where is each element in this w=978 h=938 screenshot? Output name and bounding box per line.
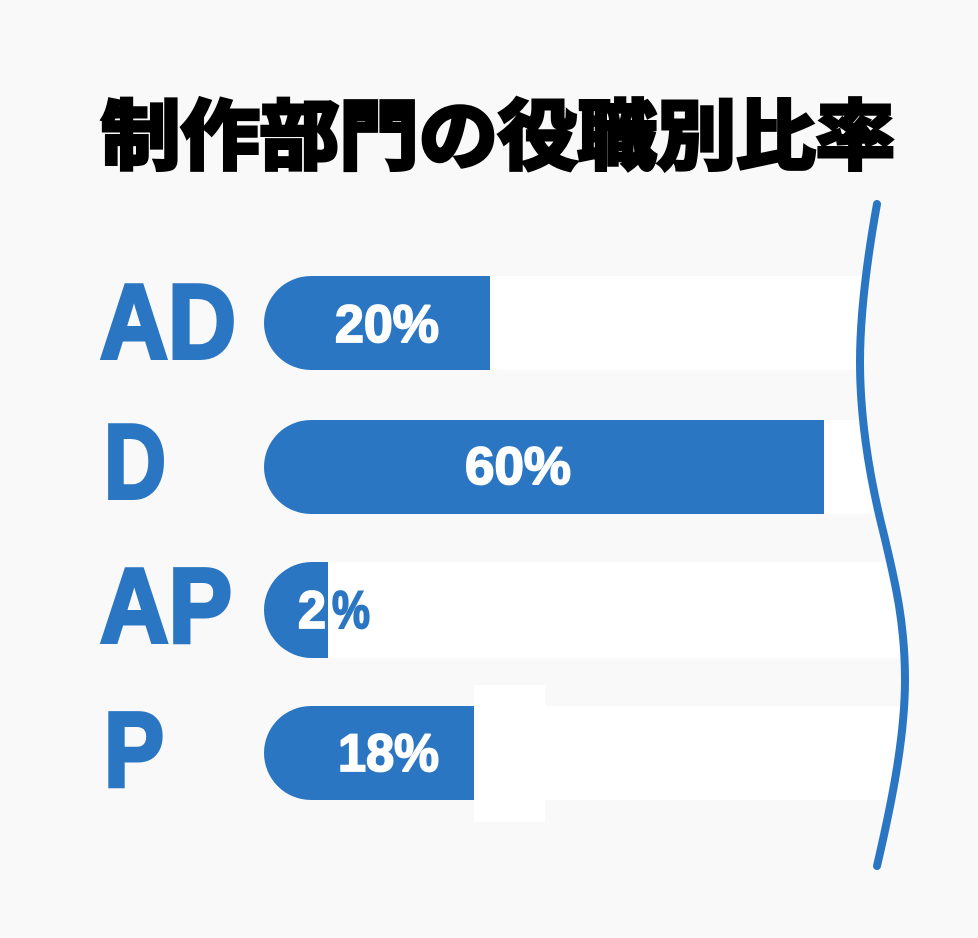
row: AP	[100, 547, 370, 665]
row: D: 60%	[465, 437, 571, 496]
row: AP: %	[332, 581, 370, 640]
row: AD: 20%	[335, 295, 439, 354]
row: P: 18%	[338, 724, 439, 783]
row: D	[104, 403, 824, 521]
title: 制作部門の役職別比率	[101, 95, 895, 180]
row: AP: 2	[298, 581, 326, 640]
curved line	[860, 204, 905, 866]
row: P: P	[104, 691, 164, 809]
row: P	[104, 691, 474, 809]
row: D: D	[104, 403, 166, 521]
white bar tracks	[300, 276, 978, 822]
row: AD: AD	[100, 263, 236, 381]
background right of curve	[860, 204, 978, 938]
row: AP: AP	[100, 547, 232, 665]
row: AD	[100, 263, 490, 381]
